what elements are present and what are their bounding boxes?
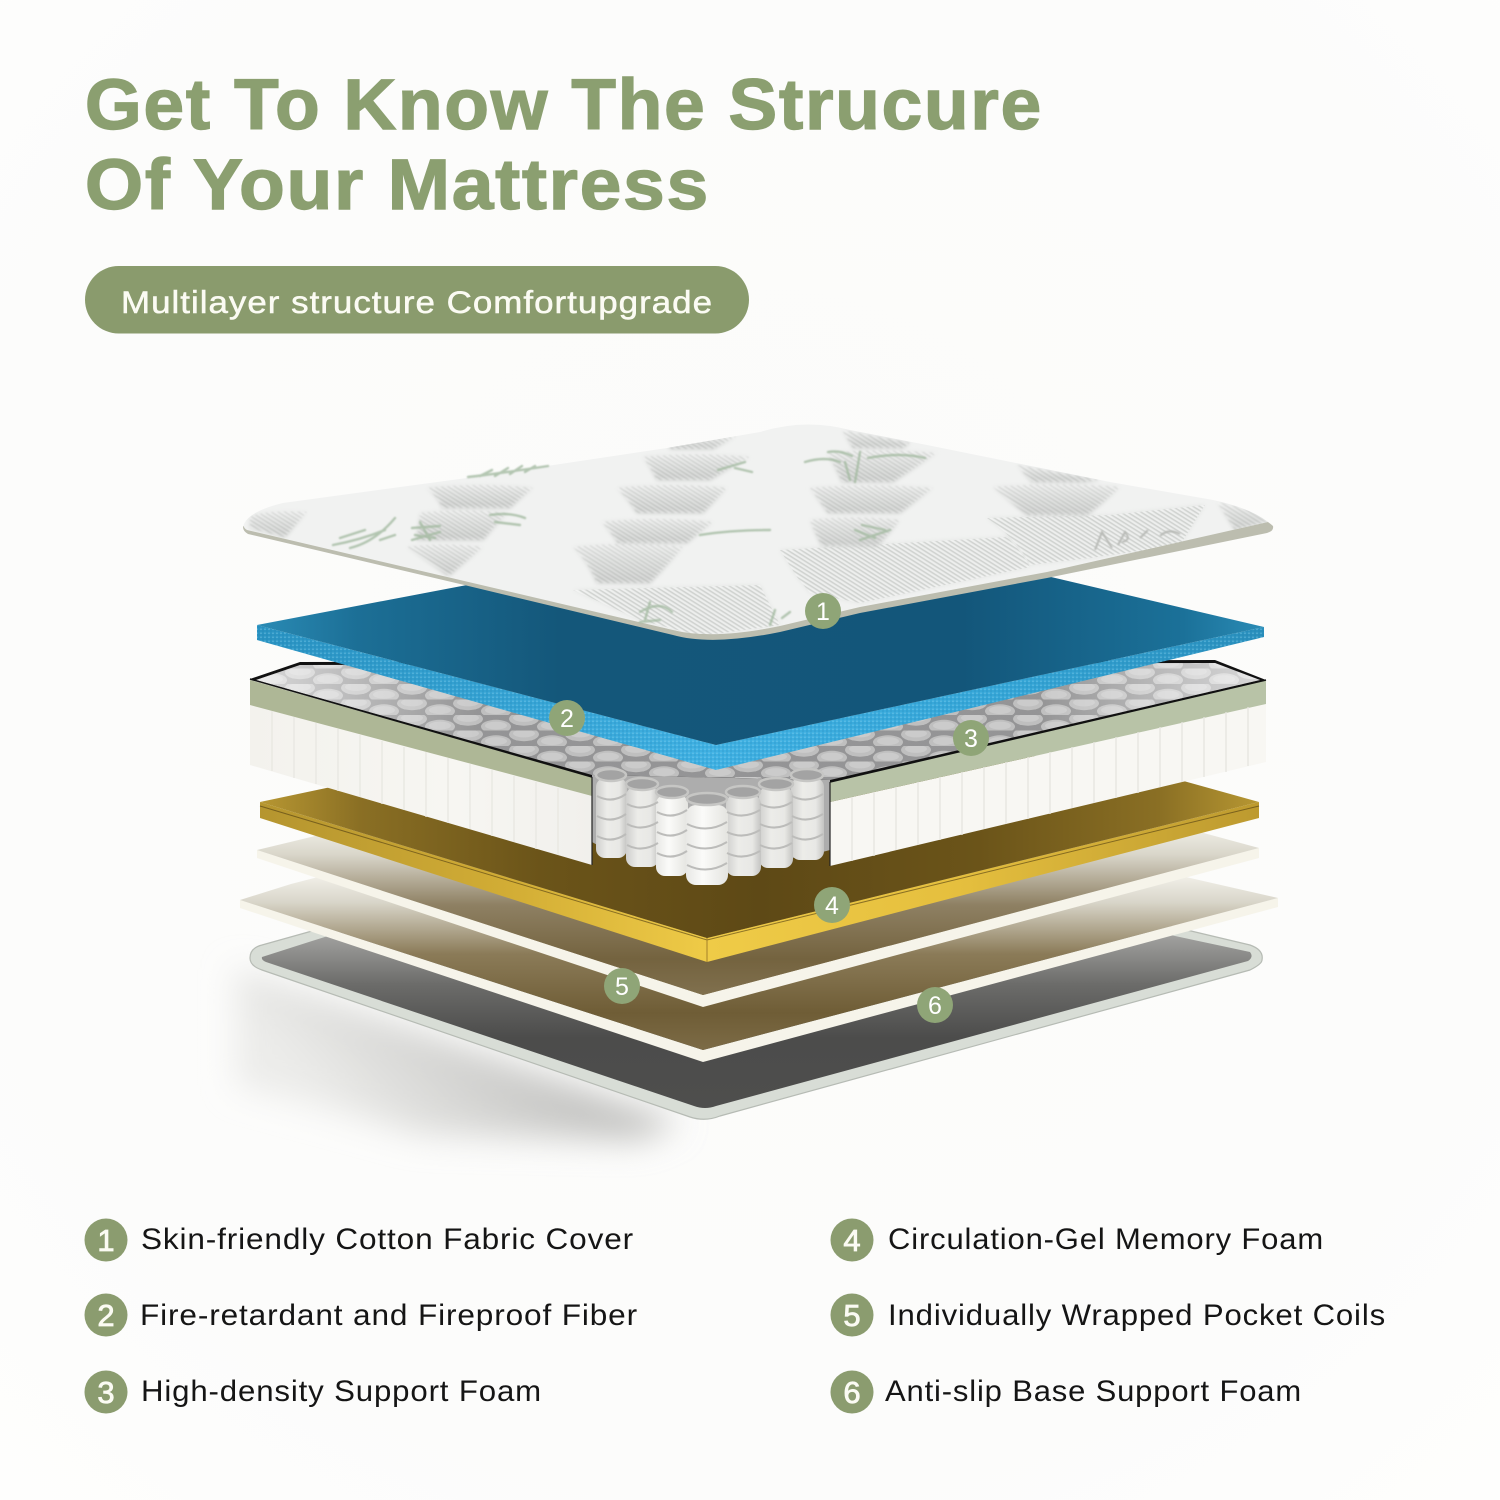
subtitle pill <box>85 266 749 334</box>
marker 2: 2 <box>560 705 574 733</box>
subtitle pill: Multilayer structure Comfortupgrade <box>121 284 713 320</box>
coil backing <box>592 775 830 858</box>
legend item 4: Circulation-Gel Memory Foam <box>888 1223 1324 1256</box>
marker 1 <box>805 593 841 629</box>
left side panel <box>250 679 592 865</box>
exposed coil columns <box>596 769 824 885</box>
marker 1: 1 <box>816 598 830 626</box>
legend item 2: Fire-retardant and Fireproof Fiber <box>140 1299 638 1332</box>
legend item 6 <box>830 1370 1302 1414</box>
legend item 4: 4 <box>843 1223 861 1258</box>
legend item 3: High-density Support Foam <box>141 1375 542 1408</box>
layer: lower beige plate <box>240 830 1278 1062</box>
title: Get To Know The Strucure <box>85 66 1043 145</box>
right side panel <box>830 680 1266 866</box>
legend item 2: 2 <box>97 1298 115 1333</box>
legend item 5: Individually Wrapped Pocket Coils <box>888 1299 1386 1332</box>
layer: pocket spring block <box>250 660 1266 885</box>
legend item 1: 1 <box>97 1223 115 1258</box>
legend item 6: 6 <box>843 1375 861 1410</box>
legend <box>84 1218 1386 1414</box>
marker 4 <box>814 887 850 923</box>
leaf print <box>333 452 925 625</box>
marker 3 <box>953 720 989 756</box>
title: Of Your Mattress <box>85 146 710 225</box>
coil tops <box>250 660 1266 782</box>
marker 4: 4 <box>825 892 839 920</box>
grey print near right edge <box>1095 530 1180 550</box>
layer: quilted cover <box>243 424 1273 640</box>
marker 6: 6 <box>928 992 942 1020</box>
marker 5 <box>604 968 640 1004</box>
legend item 6: Anti-slip Base Support Foam <box>885 1375 1302 1408</box>
marker 3: 3 <box>964 725 978 753</box>
legend item 5: 5 <box>843 1298 861 1333</box>
marker 2 <box>549 700 585 736</box>
layer: upper beige plate <box>257 790 1259 1007</box>
legend item 3: 3 <box>97 1375 115 1410</box>
layer: gold gel foam <box>260 700 1259 962</box>
tufted quilting <box>250 430 1268 636</box>
legend item 3 <box>84 1370 542 1414</box>
legend item 1: Skin-friendly Cotton Fabric Cover <box>141 1223 634 1256</box>
layer: base fabric tray <box>250 800 1262 1119</box>
title <box>85 66 1043 225</box>
legend item 4 <box>830 1218 1324 1262</box>
legend item 2 <box>84 1294 638 1336</box>
marker 5: 5 <box>615 973 629 1001</box>
floor shadow <box>236 968 680 1140</box>
exploded mattress diagram <box>236 424 1278 1140</box>
marker 6 <box>917 987 953 1023</box>
legend item 1 <box>84 1218 634 1262</box>
legend item 5 <box>830 1294 1386 1336</box>
layer: blue foam <box>257 520 1264 770</box>
